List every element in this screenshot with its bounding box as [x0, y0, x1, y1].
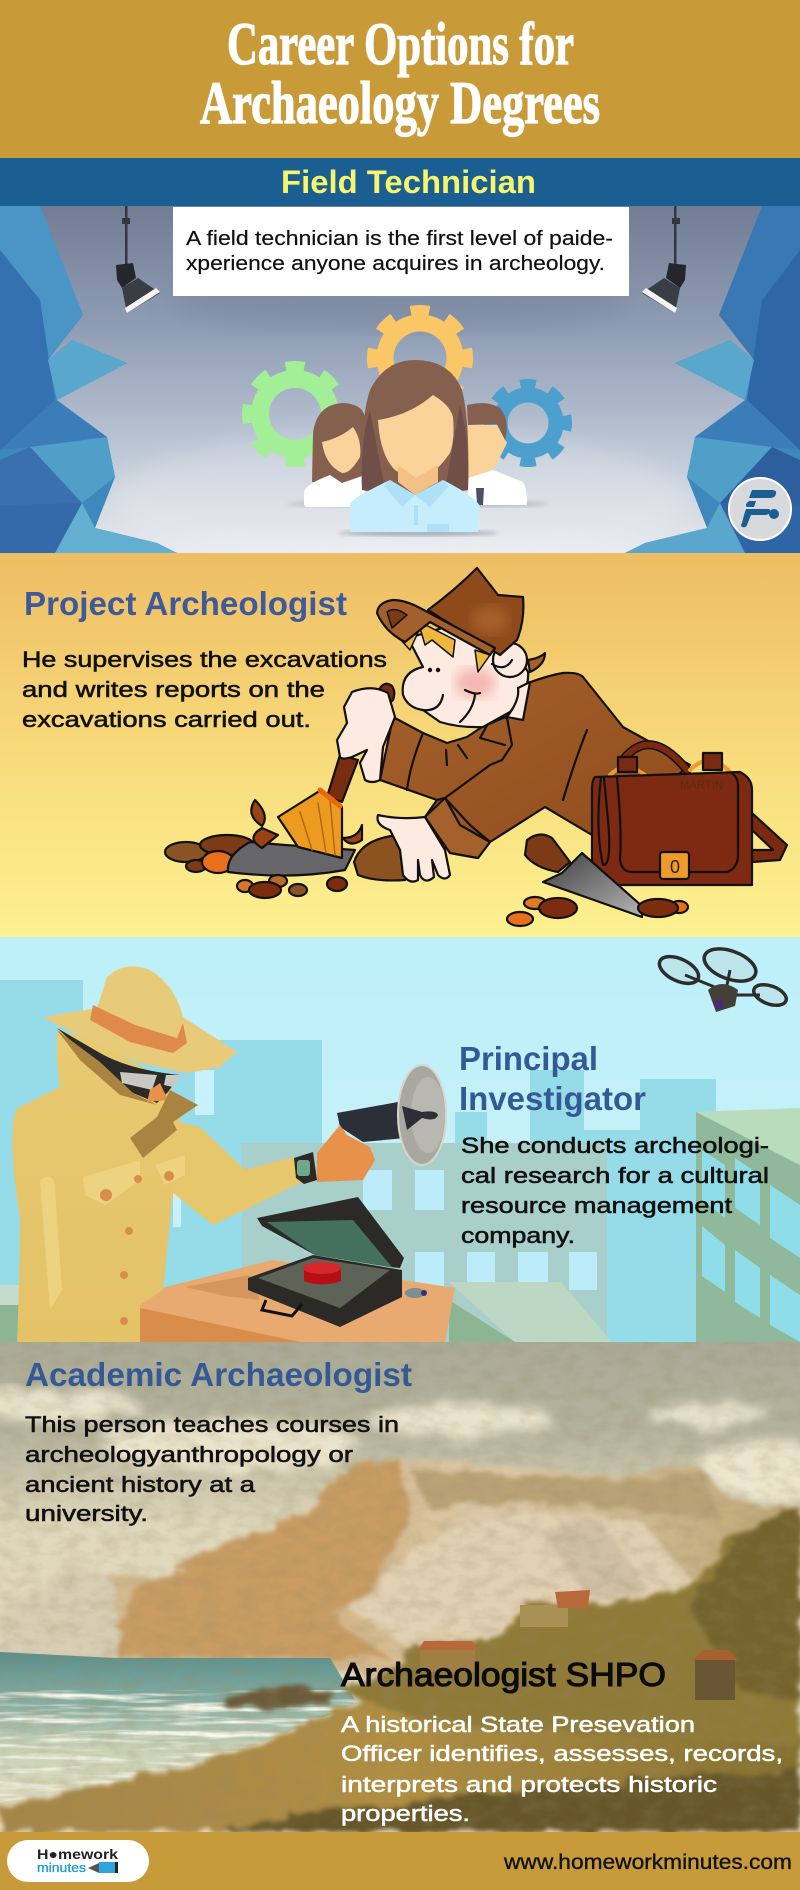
strap and briefcase: 0 [670, 857, 680, 877]
title: Archaeology Degrees [200, 70, 600, 136]
description: This person teaches courses in [25, 1412, 399, 1437]
description: cal research for a cultural [461, 1163, 769, 1188]
logo pill: minutes [37, 1860, 87, 1875]
strap and briefcase: MARTIN [680, 778, 723, 792]
icon: left spotlight [116, 206, 160, 313]
sea [0, 1652, 370, 1805]
text box: field technician description [173, 207, 629, 296]
jacket body [380, 673, 690, 858]
village buildings [418, 1590, 738, 1700]
back shadow [288, 501, 548, 507]
left low-poly curtain [0, 206, 177, 553]
hat [43, 966, 237, 1073]
description [461, 1133, 769, 1248]
heading band: Field Technician: Field Technician [281, 164, 536, 200]
description: university. [25, 1501, 148, 1526]
figure: investigator in trench coat [12, 966, 300, 1342]
heading: Investigator [459, 1080, 646, 1117]
figure: right man [467, 403, 527, 505]
footer [0, 1832, 800, 1890]
description [25, 1412, 399, 1526]
description: properties. [341, 1801, 470, 1826]
strap and briefcase [380, 673, 787, 885]
near hand [337, 688, 395, 782]
description: He supervises the excavations [22, 647, 387, 672]
description: excavations carried out. [22, 707, 311, 732]
website url: www.homeworkminutes.com [503, 1851, 792, 1874]
icon: right spotlight [642, 206, 686, 313]
description: interprets and protects historic [341, 1772, 717, 1797]
icon: round logo badge [729, 478, 791, 540]
logo pill: H●mework [37, 1846, 118, 1862]
trowel [525, 834, 570, 872]
icon: green gear [248, 367, 342, 461]
parabolic microphone [337, 1065, 446, 1165]
heading: Academic Archaeologist [25, 1356, 412, 1393]
panel: project archeologist [0, 553, 800, 937]
panel: field technician stage [0, 206, 800, 570]
right green building [696, 1108, 800, 1342]
header panel [0, 0, 800, 158]
text box: field technician description: xperience anyone acquires in archeology. [186, 253, 605, 275]
painting texture [0, 1342, 800, 1832]
logo pill [7, 1840, 149, 1882]
description [22, 647, 387, 732]
clouds [0, 1389, 800, 1500]
back hat brim tip [528, 653, 545, 672]
figure: left woman [304, 403, 365, 507]
heading band: Field Technician [0, 158, 800, 206]
illustration: archaeologist brushing [165, 568, 787, 926]
panel: principal investigator [0, 937, 800, 1342]
far hand [378, 815, 450, 882]
face [403, 620, 528, 727]
brush [370, 684, 394, 720]
description [341, 1712, 783, 1826]
hand and watch [294, 1125, 375, 1184]
city background [0, 980, 716, 1342]
rocks by trowel [507, 897, 688, 926]
beach and foreground hill [0, 1508, 800, 1832]
hat [428, 568, 523, 655]
description: and writes reports on the [22, 677, 325, 702]
title [200, 11, 600, 136]
description: Officer identifies, assesses, records, [341, 1741, 783, 1766]
rocks under brush [165, 800, 420, 898]
text box: field technician description: A field technician is the first level of paide- [186, 228, 613, 250]
description: ancient history at a [25, 1472, 256, 1497]
description: company. [461, 1223, 575, 1248]
panel: coastal landscape painting [0, 1342, 800, 1832]
description: She conducts archeologi- [461, 1133, 769, 1158]
heading: Archaeologist SHPO [341, 1656, 666, 1693]
title: Career Options for [227, 11, 574, 77]
description: resource management [461, 1193, 732, 1218]
icon: drone [655, 943, 789, 1012]
heading: Project Archeologist [24, 585, 347, 622]
mountains [0, 1457, 800, 1680]
figure: main woman [338, 360, 498, 536]
heading [459, 1040, 646, 1117]
table and briefcase [126, 1197, 455, 1342]
right low-poly curtain [625, 206, 800, 553]
icon: yellow gear [373, 311, 467, 405]
description: archeologyanthropology or [25, 1442, 353, 1467]
heading: Principal [459, 1040, 598, 1077]
description: A historical State Presevation [341, 1712, 695, 1737]
icon: blue gear [489, 384, 567, 462]
